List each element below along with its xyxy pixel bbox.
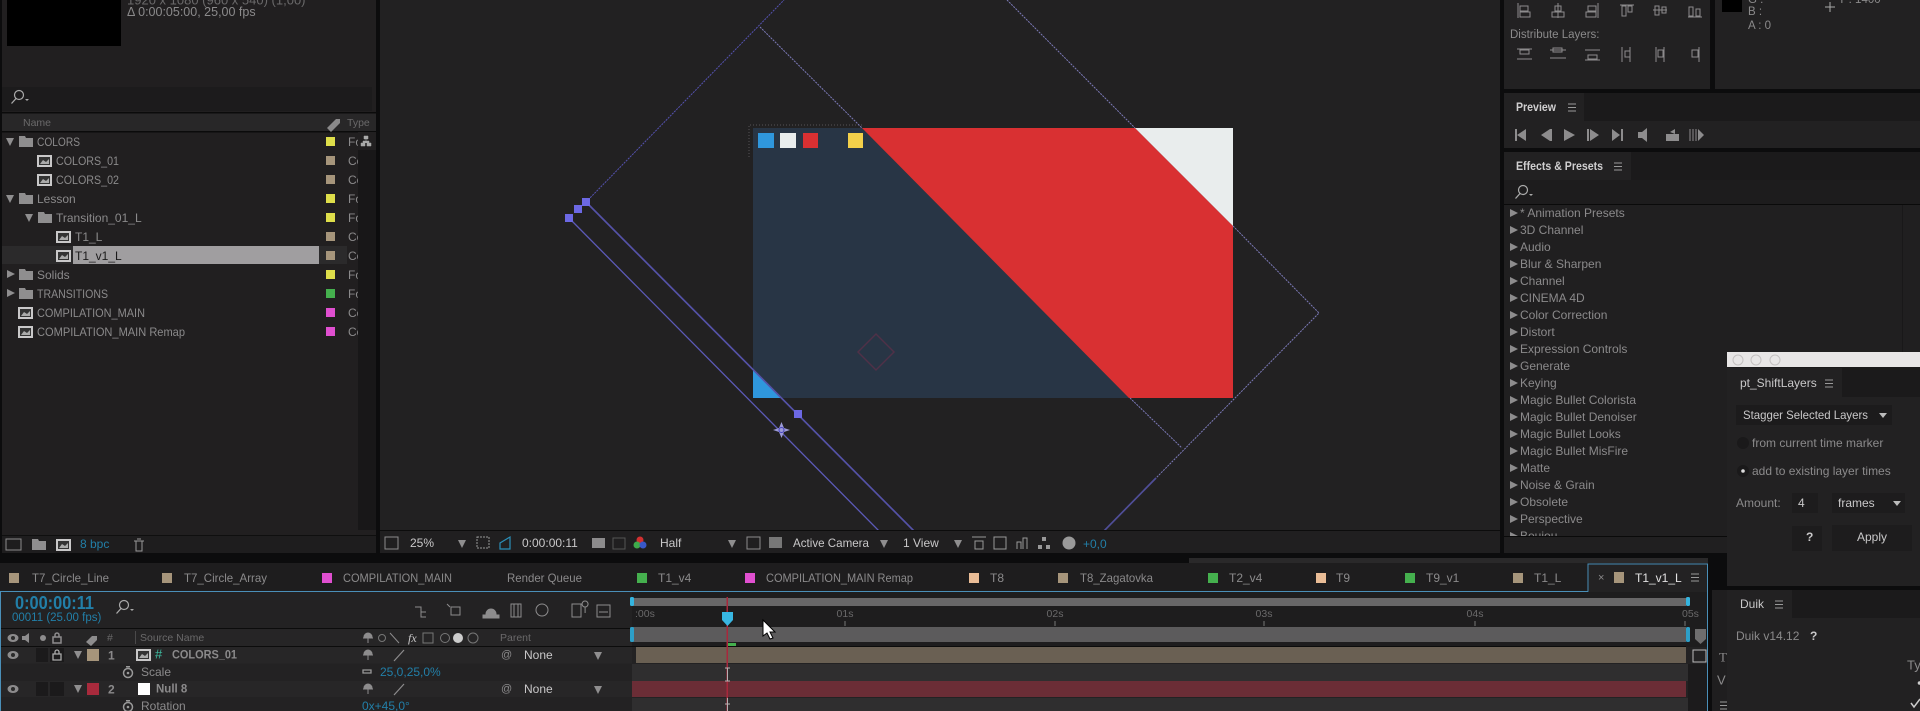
- project column header: Name: [23, 117, 51, 129]
- panel: tab bar: COMPILATION_MAIN: [343, 571, 452, 585]
- stagger dropdown: [1736, 405, 1892, 425]
- time ruler and bars: 02s: [1047, 608, 1063, 620]
- timeline column header: fx: [408, 631, 417, 645]
- project list: COLORS_02: [56, 173, 119, 187]
- project list: Co: [348, 173, 364, 187]
- viewer toolbar: Half: [660, 536, 682, 550]
- Duik version: ?: [1810, 629, 1817, 643]
- layer 2 row: 2: [108, 682, 115, 696]
- panel: tab bar: [0, 558, 1708, 591]
- panel: narrow side panel: T: [1719, 650, 1727, 664]
- preview tab: Preview: [1516, 100, 1557, 114]
- panel: align: [1504, 0, 1710, 89]
- effects list: Generate: [1520, 359, 1570, 373]
- project list: Fo: [348, 135, 362, 149]
- layer 1 row: COLORS_01: [172, 650, 238, 662]
- white corner: [1135, 128, 1233, 226]
- layer 2 row: None: [524, 682, 553, 696]
- panel: tab bar: T8_Zagatovka: [1080, 571, 1153, 585]
- distribute icons: [1517, 47, 1699, 62]
- project list: Fo: [348, 287, 362, 301]
- layer 1 row: #: [155, 646, 163, 662]
- distribute layers label: Distribute Layers:: [1510, 29, 1599, 41]
- effects list: Magic Bullet Denoiser: [1520, 410, 1637, 424]
- project list: Co: [348, 230, 364, 244]
- Duik tab: [1727, 590, 1792, 618]
- project footage info: Δ 0:00:05:00, 25,00 fps: [127, 5, 256, 19]
- option: from current time marker: from current time marker: [1752, 436, 1883, 450]
- project list: Solids: [37, 268, 70, 282]
- panel: tab bar: T9: [1336, 571, 1350, 585]
- project list: [6, 135, 364, 339]
- project column header: Type: [347, 117, 370, 129]
- project list: Lesson: [37, 192, 76, 206]
- viewer toolbar: 0:00:00:11: [522, 536, 578, 550]
- project scrollbar: [358, 132, 376, 530]
- panel: tab bar: T8: [990, 571, 1004, 585]
- viewer toolbar: +0,0: [1083, 537, 1107, 551]
- panel: tab bar: Render Queue: [507, 571, 582, 585]
- scale row: [1, 664, 632, 680]
- project list: COLORS_01: [56, 154, 119, 168]
- scale row: 25,0,25,0%: [380, 665, 441, 679]
- timeline border: [0, 564, 1708, 711]
- active tab: ×: [1598, 572, 1604, 584]
- panel: tab bar: T1_v4: [658, 571, 692, 585]
- effects list: Channel: [1520, 274, 1565, 288]
- current time: [12, 593, 101, 624]
- effects list: Magic Bullet Colorista: [1520, 393, 1636, 407]
- panel: narrow side panel: [1712, 590, 1728, 711]
- effects list: Matte: [1520, 461, 1550, 475]
- effects list: Color Correction: [1520, 308, 1607, 322]
- effects list: Expression Controls: [1520, 342, 1627, 356]
- info readout: B :: [1748, 6, 1762, 18]
- rotation row: [124, 699, 410, 711]
- help button: ?: [1806, 530, 1813, 544]
- colour swatches: [758, 133, 863, 148]
- layer 2 row: @: [501, 683, 512, 695]
- effects list: Perspective: [1520, 512, 1583, 526]
- panel: timeline: [0, 564, 1708, 711]
- effects list: Audio: [1520, 240, 1551, 254]
- time ruler and bars: 03s: [1256, 608, 1272, 620]
- effects list: Distort: [1520, 325, 1555, 339]
- panel: tab bar: T1_L: [1534, 571, 1562, 585]
- project list: Fo: [348, 211, 362, 225]
- layer 2 row: [1, 681, 632, 697]
- timeline column header: Parent: [500, 632, 531, 644]
- amount field: 4: [1798, 496, 1805, 510]
- project list: Co: [348, 154, 364, 168]
- active tab: T1_v1_L: [1635, 571, 1682, 585]
- scale row: Scale: [141, 665, 171, 679]
- project list: Co: [348, 325, 364, 339]
- project list: Co: [348, 306, 364, 320]
- amount field: frames: [1838, 496, 1875, 510]
- playhead: [722, 597, 733, 711]
- effects list: 3D Channel: [1520, 223, 1583, 237]
- time ruler and bars: :00s: [635, 608, 655, 620]
- panel: preview: [1504, 93, 1920, 148]
- project search: [2, 87, 372, 111]
- anchor point: [773, 422, 790, 438]
- panel: pt_ShiftLayers window: [1727, 352, 1920, 586]
- amount field: Amount:: [1736, 496, 1781, 510]
- path handles: [565, 198, 802, 418]
- colour channels icon: [634, 536, 646, 548]
- project list: TRANSITIONS: [37, 287, 108, 301]
- current time: 0:00:00:11: [15, 593, 94, 613]
- panel: Duik: [1727, 590, 1920, 711]
- project list: T1_L: [75, 230, 103, 244]
- viewer toolbar: 25%: [410, 536, 434, 550]
- panel: tab bar: T2_v4: [1229, 571, 1263, 585]
- Duik checkmark: [1911, 699, 1920, 707]
- panel: tab bar: T7_Circle_Array: [184, 571, 267, 585]
- option: add to existing layer times: add to existing layer times: [1752, 464, 1891, 478]
- project thumbnail: [7, 0, 121, 46]
- selected row highlight: [2, 246, 347, 264]
- timeline column header: #: [107, 632, 113, 644]
- align icons: [1518, 3, 1702, 18]
- null diamond: [858, 334, 894, 370]
- layer 1 row: 1: [108, 648, 115, 662]
- current time: 00011 (25.00 fps): [12, 612, 101, 624]
- effects list: Magic Bullet Looks: [1520, 427, 1621, 441]
- help button: [1792, 526, 1822, 551]
- viewer toolbar: 1 View: [903, 536, 939, 550]
- layer 1 row: None: [524, 648, 553, 662]
- preview tab: [1504, 93, 1584, 121]
- layer bars: [632, 643, 1688, 711]
- viewer toolbar: [380, 530, 1500, 553]
- project list: COLORS: [37, 135, 80, 149]
- timeline search: [116, 600, 134, 614]
- layer 2 row: Null 8: [156, 684, 188, 696]
- project column header: [2, 112, 376, 132]
- timeline column header: [1, 628, 632, 647]
- preview controls: [1515, 128, 1704, 142]
- active tab: [1589, 565, 1707, 592]
- project list: Co: [348, 249, 364, 263]
- time ruler and bars: 05s: [1682, 608, 1699, 620]
- timeline switches toolbar: [415, 601, 610, 618]
- Duik tab: Duik: [1740, 597, 1765, 611]
- project footer toolbar: [2, 535, 376, 553]
- Duik radio dot: [1918, 681, 1920, 685]
- layer 1 row: @: [501, 649, 512, 661]
- effects list: Blur & Sharpen: [1520, 257, 1601, 271]
- panel: project: [2, 0, 376, 553]
- blue corner: [753, 369, 782, 398]
- effects list: Noise & Grain: [1520, 478, 1595, 492]
- time ruler and bars: 01s: [837, 608, 853, 620]
- apply button: [1832, 525, 1912, 551]
- effects list: Magic Bullet MisFire: [1520, 444, 1628, 458]
- composition frame: [749, 125, 1233, 398]
- effects list: Boujou: [1520, 529, 1557, 543]
- project list: COMPILATION_MAIN: [37, 306, 145, 320]
- project footer toolbar: 8 bpc: [80, 537, 109, 551]
- project list: Fo: [348, 268, 362, 282]
- effects list: Keying: [1520, 376, 1557, 390]
- window title bar: [1727, 352, 1920, 367]
- panel: effects and presets: [1504, 152, 1920, 553]
- panel: info: [1715, 0, 1920, 89]
- info readout: [1748, 0, 1881, 32]
- project footage info: [127, 0, 306, 19]
- apply button: Apply: [1857, 530, 1887, 544]
- mouse cursor: [763, 620, 775, 639]
- right edge icons: [1688, 629, 1707, 711]
- viewer toolbar: Active Camera: [793, 536, 869, 550]
- panel: composition viewer: [380, 0, 1500, 553]
- effects tab: [1504, 152, 1631, 180]
- effects list: [1510, 206, 1637, 543]
- effects list: CINEMA 4D: [1520, 291, 1585, 305]
- window tab: pt_ShiftLayers: [1740, 376, 1817, 390]
- effects tab: Effects & Presets: [1516, 159, 1603, 173]
- info readout: A : 0: [1748, 20, 1771, 32]
- panel: tab bar: T7_Circle_Line: [32, 571, 109, 585]
- time ruler and bars: 04s: [1467, 608, 1483, 620]
- layer 1 row: [1, 646, 632, 664]
- effects list: Obsolete: [1520, 495, 1568, 509]
- red diagonal: [862, 128, 1233, 398]
- project list: T1_v1_L: [75, 249, 122, 263]
- panel: tab bar: COMPILATION_MAIN Remap: [766, 571, 913, 585]
- amount field: [1736, 493, 1905, 513]
- project list: Fo: [348, 192, 362, 206]
- project list: Transition_01_L: [56, 211, 142, 225]
- info colour swatch: [1722, 0, 1742, 12]
- timeline column header: Source Name: [140, 632, 204, 644]
- Duik version: Duik v14.12: [1736, 629, 1800, 643]
- shape layer paths: [565, 0, 1319, 535]
- effects search: [1504, 180, 1920, 205]
- time ruler and bars: [630, 592, 1708, 647]
- project list: COMPILATION_MAIN Remap: [37, 325, 185, 339]
- window tab: [1727, 368, 1842, 397]
- panel: narrow side panel: V: [1717, 672, 1726, 688]
- panel: tab bar: T9_v1: [1426, 571, 1460, 585]
- comp background: [753, 128, 1233, 398]
- comp title-safe corner: [749, 125, 862, 157]
- stagger dropdown: Stagger Selected Layers: [1743, 408, 1868, 422]
- effects list: * Animation Presets: [1520, 206, 1625, 220]
